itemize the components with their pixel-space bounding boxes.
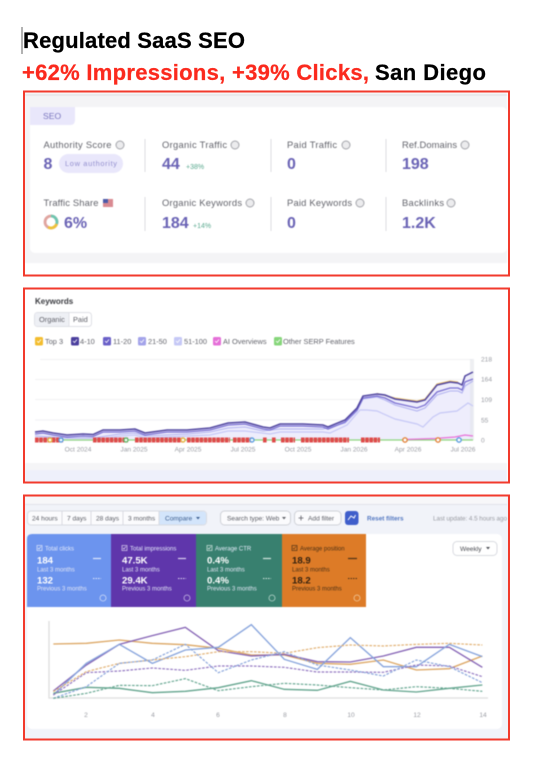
metric card: Total clicks: 184 (37, 556, 54, 566)
metric: Organic Traffic: Organic Traffic (162, 139, 227, 150)
metric: Organic Keywords (162, 197, 254, 232)
x axis labels: 2 (84, 712, 88, 719)
panel: Keywords chart (24, 288, 509, 482)
x axis labels: Oct 2025 (285, 446, 312, 454)
panel: SEO overview (24, 92, 509, 276)
metric card: Total clicks: Last 3 months (37, 568, 75, 574)
date range buttons: 24 hours (32, 516, 58, 522)
filter controls: Search type: Web (227, 516, 280, 522)
y axis labels: 0 (481, 438, 485, 444)
metric: Authority Score: Authority Score (44, 139, 112, 150)
x axis labels: 14 (479, 712, 487, 719)
metric card: Average position: Previous 3 months (292, 586, 342, 592)
y axis labels (481, 356, 492, 444)
metric: Backlinks: Backlinks (402, 197, 444, 208)
metric card: Total clicks: Total clicks (45, 546, 74, 552)
filter controls: Reset filters (367, 516, 404, 522)
metric card: Total impressions: Total impressions (130, 546, 176, 552)
subtitle: San Diego (375, 60, 486, 85)
line chart: performance comparison (49, 621, 488, 719)
metric card: Total impressions: Last 3 months (122, 568, 160, 574)
title (22, 28, 486, 85)
metric: Traffic Share: Traffic Share (44, 197, 98, 208)
metric card: Total clicks: Previous 3 months (37, 586, 87, 592)
panel: Search Console performance (24, 496, 509, 740)
metric: Paid Keywords: Paid Keywords (287, 197, 352, 208)
metric: Authority Score (44, 139, 124, 173)
metric: Paid Keywords: 0 (287, 215, 296, 232)
SEO tab: SEO (43, 111, 61, 121)
metric card: Total impressions: 47.5K (122, 556, 148, 566)
metric: Backlinks (402, 197, 455, 232)
x axis labels: Jul 2026 (451, 446, 476, 454)
metric card: Total impressions: Previous 3 months (122, 586, 172, 592)
heading: Keywords: Keywords (35, 297, 74, 306)
metric: Paid Keywords (287, 197, 364, 232)
x axis labels: Jan 2026 (340, 446, 368, 454)
icon: share donut (45, 216, 57, 228)
SEO tab (30, 107, 75, 125)
metric card: Average position: Average position (300, 546, 345, 552)
metric: Organic Traffic: 44 (162, 156, 180, 173)
x axis labels: 4 (151, 712, 155, 719)
metric card: Average CTR: Previous 3 months (207, 586, 257, 592)
legend: Top 3 (45, 337, 63, 346)
metric card: Average CTR: Last 3 months (207, 568, 245, 574)
y axis labels: 55 (481, 418, 489, 424)
metric card: Total impressions (111, 534, 196, 607)
legend: 21-50 (148, 337, 167, 346)
metric: Authority Score: Low authority (65, 159, 117, 168)
date range buttons (28, 511, 206, 525)
metric card: Total clicks: 132 (37, 576, 53, 586)
filter controls (220, 511, 404, 525)
x axis labels: 12 (413, 712, 421, 719)
legend (35, 337, 355, 346)
legend: AI Overviews (223, 337, 267, 346)
x axis labels: Apr 2026 (395, 446, 422, 454)
line chart: keyword rankings (35, 356, 492, 454)
tabs: Organic / Paid: Organic (39, 315, 65, 324)
text cursor (22, 27, 23, 54)
metric: Organic Traffic: +38% (186, 164, 204, 171)
metric card: Average CTR (196, 534, 282, 607)
x axis labels: Jan 2025 (120, 446, 148, 454)
metric card: Total impressions: 29.4K (122, 576, 148, 586)
metric: Ref.Domains: 198 (402, 156, 429, 173)
x axis labels: 6 (216, 712, 220, 719)
title: Regulated SaaS SEO (23, 28, 245, 53)
date range buttons: Compare (165, 516, 192, 522)
subtitle: +62% Impressions, +39% Clicks, (22, 60, 369, 85)
date range buttons: 28 days (96, 516, 120, 522)
metric card: Average position: Last 3 months (292, 568, 330, 574)
filter controls: Add filter (308, 516, 335, 522)
x axis labels: 10 (347, 712, 355, 719)
metric: Backlinks: 1.2K (402, 215, 436, 232)
legend: 11-20 (113, 337, 131, 346)
x axis labels (65, 446, 476, 454)
metric card: Average CTR: Average CTR (215, 546, 252, 552)
SERP feature markers (35, 435, 473, 442)
weekly dropdown: Weekly (460, 546, 482, 553)
metric: Paid Traffic: 0 (287, 156, 296, 173)
metric: Organic Keywords: Organic Keywords (162, 197, 242, 208)
metric: Organic Traffic (162, 139, 239, 173)
y axis labels: 218 (481, 356, 492, 364)
legend: 4-10 (80, 337, 95, 346)
metric: Organic Keywords: +14% (193, 223, 211, 230)
date range buttons: 7 days (67, 516, 87, 522)
metric: Authority Score: 8 (44, 156, 52, 173)
metric card: Average position (282, 534, 366, 607)
metric: Paid Traffic (287, 139, 350, 173)
metric: Traffic Share: 6% (64, 215, 87, 232)
x axis labels: Jul 2025 (231, 446, 256, 454)
metric: Paid Traffic: Paid Traffic (287, 139, 337, 150)
metric card: Average CTR: 0.4% (207, 556, 229, 566)
legend: Other SERP Features (283, 337, 355, 346)
x axis labels: 8 (283, 712, 287, 719)
metric: Traffic Share (44, 197, 113, 232)
metric: Organic Keywords: 184 (162, 215, 189, 232)
metric: Ref.Domains (402, 139, 469, 173)
x axis labels (84, 712, 487, 719)
metric card: Average position: 18.2 (292, 576, 311, 586)
last update note: Last update: 4.5 hours ago (433, 516, 507, 522)
x axis labels: Apr 2025 (175, 446, 202, 454)
y axis labels: 109 (481, 397, 492, 404)
weekly dropdown (453, 542, 497, 556)
metric card: Average position: 18.9 (292, 556, 311, 566)
legend: 51-100 (184, 337, 207, 346)
tabs: Organic / Paid: Paid (73, 315, 88, 324)
tabs: Organic / Paid (34, 312, 92, 326)
date range buttons: 3 months (128, 516, 156, 522)
metric card: Total clicks (27, 534, 111, 607)
metric card: Average CTR: 0.4% (207, 576, 229, 586)
x axis labels: Oct 2024 (65, 446, 92, 454)
metric: Ref.Domains: Ref.Domains (402, 139, 457, 150)
y axis labels: 164 (481, 376, 492, 384)
icon: US flag (103, 199, 113, 207)
